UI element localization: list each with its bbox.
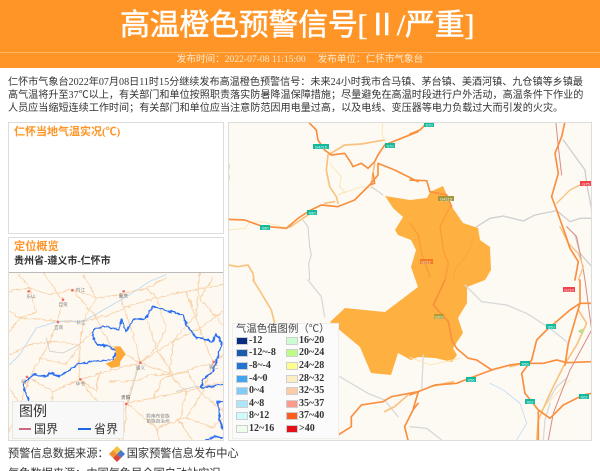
panel: location overview: [8, 237, 224, 441]
city labels: 遵义: [136, 364, 145, 371]
temperature colour legend: -12~-8: [249, 347, 276, 358]
temperature colour legend: 24~28: [299, 360, 324, 371]
legend item: province border: 省界: [94, 422, 118, 436]
city labels: 重庆: [119, 293, 128, 300]
temperature colour legend: 37~40: [299, 410, 324, 421]
header banner: [0, 0, 600, 68]
temperature colour legend: 32~35: [299, 385, 324, 396]
title: 高温橙色预警信号[Ⅱ/严重]: [120, 9, 474, 42]
warning description text: [8, 76, 583, 114]
main map: [228, 122, 592, 441]
temperature colour legend: 16~20: [299, 335, 324, 346]
highway badges: S70: [386, 144, 394, 148]
city labels: 自贡: [58, 301, 68, 308]
overview map: [8, 272, 224, 442]
legend title: 气温色值图例（℃）: [236, 324, 330, 335]
temperature colour legend: 8~12: [249, 410, 269, 421]
highway badges: S302: [434, 314, 444, 320]
Renhuai warning area: [330, 186, 491, 375]
city markers: [26, 289, 215, 405]
overview map legend: [12, 401, 124, 439]
city labels: 贵阳: [121, 394, 131, 401]
warning description text: 人员应当缩短连续工作时间；有关部门和单位应当注意防范因用电量过高，以及电线、变压器等电力负载过大而引发的火灾。: [8, 102, 563, 114]
roads: north-east: [410, 122, 592, 280]
header divider: [0, 52, 600, 53]
highway badges: S02: [526, 400, 534, 404]
temperature colour legend: 35~37: [299, 398, 324, 409]
highway badges: G4215: [440, 196, 453, 202]
icon: warning centre logo: [109, 446, 125, 462]
highway badges: S80: [308, 210, 316, 216]
highway badges: S80: [261, 226, 269, 230]
temperature colour legend: -8~-4: [249, 360, 271, 371]
city labels: 铜仁: [209, 364, 219, 371]
roads: south-east: [410, 280, 592, 440]
temperature colour legend: -12: [249, 335, 262, 346]
panel: local temperature: [8, 122, 224, 234]
city labels: 黔南布依族: [146, 412, 170, 419]
city labels: 长江: [76, 319, 86, 326]
temperature colour legend: 20~24: [299, 347, 324, 358]
city labels: 苗族自治州: [146, 417, 170, 424]
city labels: 毕节: [76, 381, 85, 388]
temperature colour legend: 12~16: [249, 423, 274, 434]
roads: north-west: [228, 120, 418, 280]
city labels: [21, 286, 219, 424]
temperature colour legend: 4~8: [249, 398, 264, 409]
publish info: 发布时间：2022-07-08 11:15:00 发布单位：仁怀市气象台: [177, 54, 423, 65]
temperature colour legend: 0~4: [249, 385, 264, 396]
green patch: [228, 161, 230, 186]
temperature colour legend: -4~0: [249, 373, 268, 384]
city labels: 内江: [76, 286, 85, 293]
panel heading: local temperature: 仁怀当地气温实况(℃): [14, 126, 120, 138]
highway badges: S70: [425, 122, 433, 128]
city labels: 乐山: [26, 293, 36, 300]
temperature colour legend: 28~32: [299, 373, 324, 384]
highway badges: S56: [521, 362, 529, 366]
warning description text: 高气温将升至37℃以上，有关部门和单位按照职责落实防暑降温保障措施；尽量避免在高温时段进行户外活动，高温条件下作业的: [8, 90, 583, 100]
highway badges: G4215: [315, 144, 328, 150]
warning description text: 仁怀市气象台2022年07月08日11时15分继续发布高温橙色预警信号：未来24小时我市合马镇、茅台镇、美酒河镇、九仓镇等乡镇最: [8, 76, 583, 88]
highway badges: G210: [564, 288, 575, 292]
warning data source: 预警信息数据来源： 国家预警信息发布中心: [8, 448, 239, 460]
highway badges: G75: [582, 182, 591, 186]
city labels: 宜宾: [54, 324, 64, 331]
highway badges: G212: [421, 260, 432, 264]
highway badges: S56: [467, 378, 475, 382]
legend title: 图例: [19, 403, 47, 419]
legend item: national border: 国界: [34, 422, 58, 436]
Renhuai highlighted area: [106, 346, 126, 368]
location path: 贵州省-遵义市-仁怀市: [14, 256, 111, 267]
temperature colour legend: >40: [299, 423, 315, 434]
panel heading: location overview: 定位概览: [14, 241, 59, 253]
country/province border: [23, 306, 223, 441]
city labels: 昭: [21, 380, 26, 386]
roads: south-west: [253, 280, 418, 440]
highway badges: [260, 122, 592, 404]
highway badges: S02: [580, 394, 588, 400]
temperature colour legend: [232, 323, 339, 439]
highway badges: S50: [547, 324, 555, 330]
